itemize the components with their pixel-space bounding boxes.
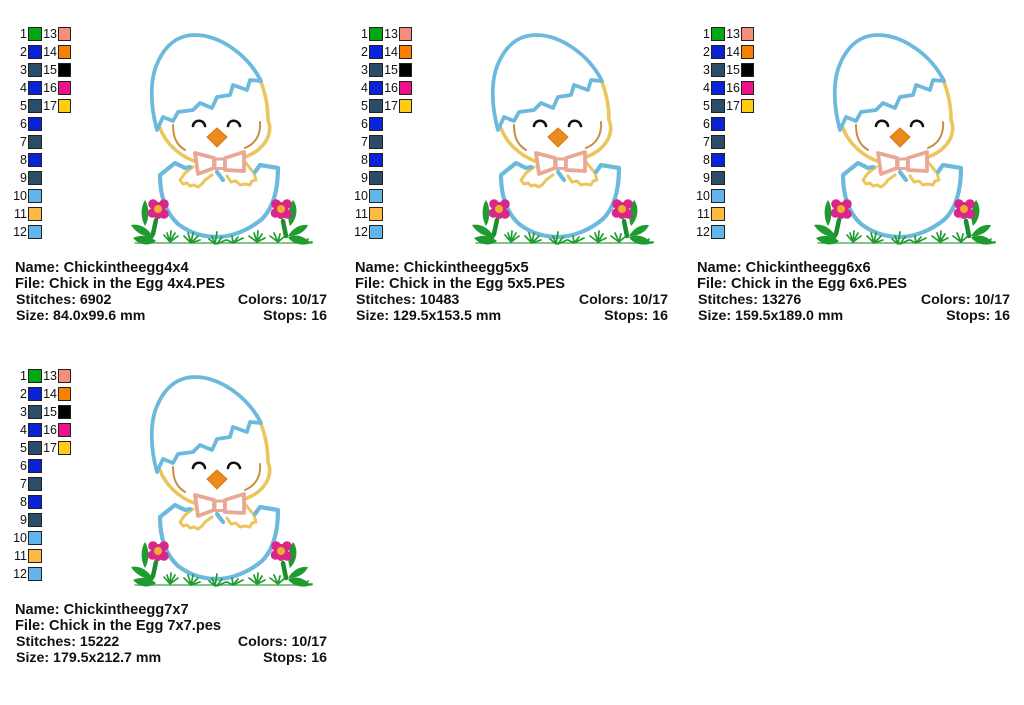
design details: 6x6 <box>697 260 1010 324</box>
design details: 4x4: Colors: 10/17 <box>238 292 327 308</box>
design details: 5x5: Stops: 16 <box>604 308 668 324</box>
color legend: 5x5: 5 <box>361 99 368 113</box>
illustration: chick in egg 4x4 <box>131 35 312 245</box>
design details: 6x6: Name: Chickintheegg6x6 <box>697 260 871 276</box>
color legend: 5x5: 1 <box>361 27 368 41</box>
design details: 7x7: Size: 179.5x212.7 mm <box>16 650 161 666</box>
color legend: 6x6: 10 <box>696 189 710 203</box>
design details: 4x4: Stitches: 6902 <box>16 292 112 308</box>
color legend: 7x7: 5 <box>20 441 27 455</box>
color legend: 5x5: 15 <box>384 63 398 77</box>
color legend: 4x4: 4 <box>20 81 27 95</box>
design details: 4x4 <box>15 260 327 324</box>
design details: 4x4: Size: 84.0x99.6 mm <box>16 308 145 324</box>
color legend: 4x4: 10 <box>13 189 27 203</box>
design details: 6x6: Size: 159.5x189.0 mm <box>698 308 843 324</box>
color legend: 4x4: 13 <box>43 27 57 41</box>
color legend: 5x5: 11 <box>355 207 368 221</box>
color legend: 5x5: 6 <box>361 117 368 131</box>
color legend: 7x7: 2 <box>20 387 27 401</box>
color legend: 7x7: 1 <box>20 369 27 383</box>
color legend: 4x4: 16 <box>43 81 57 95</box>
color legend: 7x7: 10 <box>13 531 27 545</box>
color legend: 5x5: 13 <box>384 27 398 41</box>
color legend: 5x5: 17 <box>384 99 398 113</box>
color legend: 5x5: 3 <box>361 63 368 77</box>
color legend: 5x5: 9 <box>361 171 368 185</box>
color legend: 7x7: 14 <box>43 387 57 401</box>
color legend: 6x6: 9 <box>703 171 710 185</box>
design details: 6x6: Stitches: 13276 <box>698 292 801 308</box>
color legend: 7x7: 16 <box>43 423 57 437</box>
color legend: 5x5: 4 <box>361 81 368 95</box>
color legend: 6x6: 15 <box>726 63 740 77</box>
color legend: 7x7: 12 <box>13 567 27 581</box>
color legend: 5x5: 10 <box>354 189 368 203</box>
design details: 7x7: Stops: 16 <box>263 650 327 666</box>
color legend: 7x7 <box>13 369 70 581</box>
design details: 5x5: File: Chick in the Egg 5x5.PES <box>355 276 565 292</box>
color legend: 6x6 <box>696 27 754 239</box>
color legend: 4x4: 5 <box>20 99 27 113</box>
design details: 7x7: Name: Chickintheegg7x7 <box>15 602 189 618</box>
color legend: 5x5: 2 <box>361 45 368 59</box>
panel: 5x5 design <box>354 27 668 324</box>
color legend: 5x5: 7 <box>361 135 368 149</box>
design details: 5x5: Name: Chickintheegg5x5 <box>355 260 529 276</box>
color legend: 7x7: 11 <box>14 549 27 563</box>
color legend: 7x7: 7 <box>20 477 27 491</box>
color legend: 6x6: 8 <box>703 153 710 167</box>
panel: 7x7 design <box>13 369 327 666</box>
color legend: 7x7: 15 <box>43 405 57 419</box>
color legend: 7x7: 8 <box>20 495 27 509</box>
color legend: 4x4 <box>13 27 70 239</box>
color legend: 4x4: 11 <box>14 207 27 221</box>
color legend: 4x4: 6 <box>20 117 27 131</box>
color legend: 6x6: 5 <box>703 99 710 113</box>
design details: 5x5: Size: 129.5x153.5 mm <box>356 308 501 324</box>
color legend: 5x5: 16 <box>384 81 398 95</box>
color legend: 7x7: 13 <box>43 369 57 383</box>
color legend: 4x4: 3 <box>20 63 27 77</box>
color legend: 5x5: 12 <box>354 225 368 239</box>
color legend: 4x4: 1 <box>20 27 27 41</box>
color legend: 7x7: 9 <box>20 513 27 527</box>
design details: 6x6: Stops: 16 <box>946 308 1010 324</box>
color legend: 6x6: 3 <box>703 63 710 77</box>
color legend: 4x4: 15 <box>43 63 57 77</box>
color legend: 4x4: 17 <box>43 99 57 113</box>
design details: 4x4: File: Chick in the Egg 4x4.PES <box>15 276 225 292</box>
color legend: 6x6: 13 <box>726 27 740 41</box>
panel: 6x6 design <box>696 27 1010 324</box>
design details: 4x4: Name: Chickintheegg4x4 <box>15 260 189 276</box>
color legend: 6x6: 11 <box>697 207 710 221</box>
color legend: 5x5 <box>354 27 412 239</box>
design details: 5x5: Stitches: 10483 <box>356 292 459 308</box>
color legend: 7x7: 17 <box>43 441 57 455</box>
color legend: 5x5: 14 <box>384 45 398 59</box>
color legend: 6x6: 7 <box>703 135 710 149</box>
design details: 6x6: Colors: 10/17 <box>921 292 1010 308</box>
color legend: 4x4: 14 <box>43 45 57 59</box>
illustration: chick in egg 5x5 <box>472 35 653 245</box>
illustration: chick in egg 7x7 <box>131 377 312 587</box>
color legend: 6x6: 1 <box>703 27 710 41</box>
design details: 7x7: File: Chick in the Egg 7x7.pes <box>15 618 221 634</box>
design details: 7x7: Colors: 10/17 <box>238 634 327 650</box>
design details: 7x7: Stitches: 15222 <box>16 634 119 650</box>
color legend: 6x6: 4 <box>703 81 710 95</box>
color legend: 6x6: 17 <box>726 99 740 113</box>
design details: 6x6: File: Chick in the Egg 6x6.PES <box>697 276 907 292</box>
panel: 4x4 design <box>13 27 327 324</box>
color legend: 4x4: 7 <box>20 135 27 149</box>
color legend: 4x4: 8 <box>20 153 27 167</box>
color legend: 6x6: 16 <box>726 81 740 95</box>
design details: 4x4: Stops: 16 <box>263 308 327 324</box>
color legend: 7x7: 6 <box>20 459 27 473</box>
color legend: 4x4: 12 <box>13 225 27 239</box>
color legend: 6x6: 14 <box>726 45 740 59</box>
color legend: 7x7: 4 <box>20 423 27 437</box>
color legend: 7x7: 3 <box>20 405 27 419</box>
color legend: 6x6: 12 <box>696 225 710 239</box>
design details: 5x5 <box>355 260 668 324</box>
color legend: 5x5: 8 <box>361 153 368 167</box>
color legend: 6x6: 6 <box>703 117 710 131</box>
illustration: chick in egg 6x6 <box>814 35 995 245</box>
design details: 7x7 <box>15 602 327 666</box>
color legend: 4x4: 9 <box>20 171 27 185</box>
color legend: 6x6: 2 <box>703 45 710 59</box>
color legend: 4x4: 2 <box>20 45 27 59</box>
design details: 5x5: Colors: 10/17 <box>579 292 668 308</box>
